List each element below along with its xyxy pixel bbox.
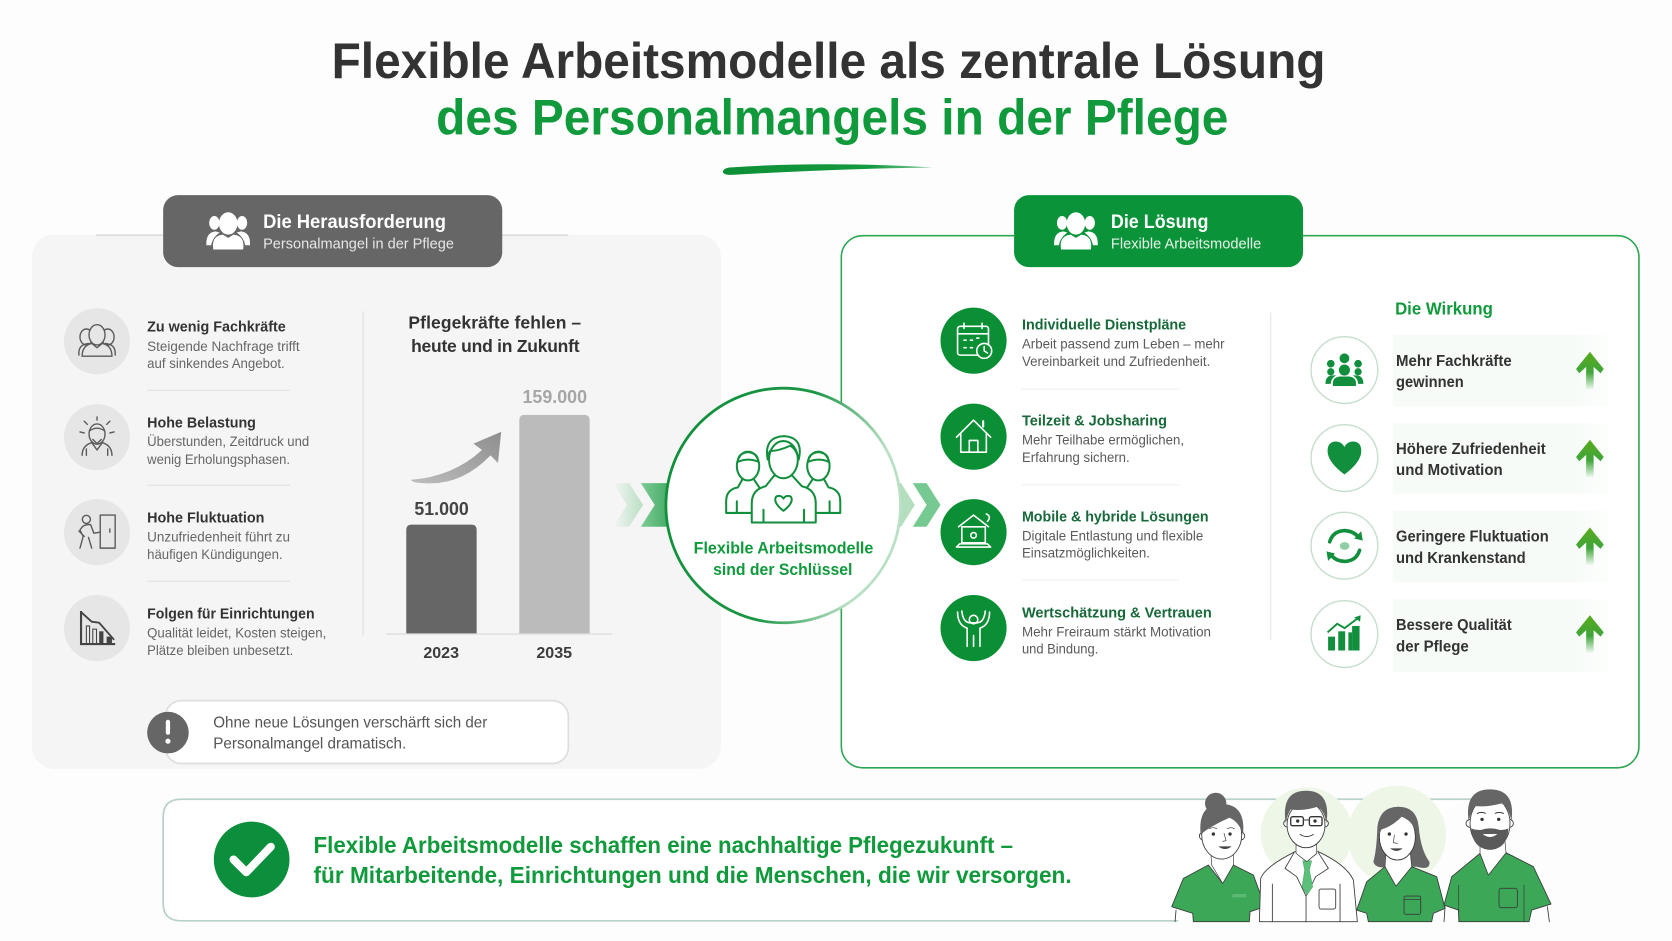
growth arrow — [411, 432, 501, 483]
banner: bottom conclusion: Flexible Arbeitsmodelle schaffen eine nachhaltige Pflegezukunft – — [314, 832, 1013, 858]
person: doctor with glasses — [1259, 791, 1357, 922]
panel header: Die Herausforderung: Die Herausforderung — [263, 211, 446, 233]
item: Hohe Belastung: Hohe Belastung — [147, 415, 256, 432]
item: Hohe Belastung: Überstunden, Zeitdruck und — [147, 434, 309, 449]
title underline brush stroke — [723, 164, 933, 175]
icon: care team with heart — [726, 436, 840, 523]
person: nurse with beard — [1444, 789, 1551, 922]
solution: Teilzeit & Jobsharing: Mehr Teilhabe ermöglichen, — [1022, 433, 1184, 448]
impact: Höhere Zufriedenheit und Motivation — [1311, 423, 1608, 494]
bar 2023: 51.000 — [414, 498, 469, 519]
item: Zu wenig Fachkräfte: Zu wenig Fachkräfte — [147, 319, 286, 336]
solution: Teilzeit & Jobsharing — [940, 404, 1184, 470]
person: nurse with long hair — [1357, 807, 1445, 922]
bar 2035 — [519, 386, 590, 662]
item: Hohe Fluktuation: häufigen Kündigungen. — [147, 547, 283, 562]
bar 2035: 2035 — [536, 645, 572, 662]
solution: Wertschätzung & Vertrauen: Mehr Freiraum stärkt Motivation — [1022, 625, 1211, 640]
icon: check mark — [214, 822, 290, 897]
banner: bottom conclusion: für Mitarbeitende, Einrichtungen und die Menschen, die wir versorgen. — [314, 862, 1072, 888]
callout: warning: Ohne neue Lösungen verschärft sich der — [213, 714, 487, 731]
heading: Die Wirkung: Die Wirkung — [1395, 299, 1493, 319]
bar chart: Pflegekräfte fehlen — [386, 312, 612, 662]
solution: Individuelle Dienstpläne: Arbeit passend zum Leben – mehr — [1022, 337, 1225, 352]
item: Zu wenig Fachkräfte — [64, 308, 300, 374]
impact: Mehr Fachkräfte gewinnen: Mehr Fachkräfte — [1396, 353, 1512, 370]
title — [332, 33, 1325, 145]
panel header: Die Herausforderung — [163, 195, 502, 267]
solution: Wertschätzung & Vertrauen: und Bindung. — [1022, 642, 1098, 657]
item: Hohe Belastung: wenig Erholungsphasen. — [146, 452, 290, 467]
bar 2023 — [406, 498, 477, 662]
banner: bottom conclusion — [163, 799, 1472, 921]
solution: Teilzeit & Jobsharing: Erfahrung sichern. — [1022, 450, 1130, 465]
panel header: Die Herausforderung: Personalmangel in der Pflege — [263, 235, 454, 252]
item: Folgen für Einrichtungen: Plätze bleiben unbesetzt. — [147, 643, 293, 658]
item: Zu wenig Fachkräfte: Steigende Nachfrage trifft — [147, 339, 300, 354]
arrow: chevrons into centre — [613, 483, 672, 527]
panel header: Die Lösung: Flexible Arbeitsmodelle — [1111, 235, 1261, 252]
impact: Bessere Qualität der Pflege: Bessere Qualität — [1396, 617, 1512, 634]
solution: Wertschätzung & Vertrauen: Wertschätzung & Vertrauen — [1022, 604, 1212, 621]
item: Folgen für Einrichtungen: Folgen für Einrichtungen — [147, 606, 315, 623]
person: nurse with bun — [1172, 793, 1265, 922]
panel: Die Herausforderung — [32, 195, 721, 769]
illustration: care team — [1172, 786, 1551, 922]
impact: Geringere Fluktuation und Krankenstand — [1311, 511, 1608, 582]
impact: Mehr Fachkräfte gewinnen — [1311, 335, 1608, 406]
solution: Wertschätzung & Vertrauen — [940, 595, 1212, 661]
arrow: chevrons out of centre — [890, 483, 940, 527]
item: Folgen für Einrichtungen: Qualität leidet, Kosten steigen, — [147, 626, 326, 641]
centre circle: Flexible Arbeitsmodelle sind der Schlüssel: sind der Schlüssel — [713, 560, 852, 579]
panel header: Die Lösung: Die Lösung — [1111, 211, 1208, 233]
solution: Mobile & hybride Lösungen: Digitale Entlastung und flexible — [1022, 529, 1203, 544]
solution: Teilzeit & Jobsharing: Teilzeit & Jobsharing — [1022, 413, 1167, 430]
item: Hohe Fluktuation: Hohe Fluktuation — [147, 510, 264, 527]
chart heading: Pflegekräfte fehlen – — [408, 312, 581, 332]
bar 2023: 2023 — [423, 645, 459, 662]
panel header: Die Lösung — [1014, 195, 1303, 267]
solution: Individuelle Dienstpläne: Individuelle Dienstpläne — [1022, 317, 1186, 334]
impact: Geringere Fluktuation und Krankenstand: Geringere Fluktuation — [1396, 529, 1549, 546]
chart heading: heute und in Zukunft — [411, 336, 580, 356]
solution: Mobile & hybride Lösungen: Mobile & hybride Lösungen — [1022, 508, 1209, 525]
solution: Mobile & hybride Lösungen: Einsatzmöglichkeiten. — [1022, 546, 1150, 561]
item: Hohe Belastung — [64, 404, 309, 470]
item: Zu wenig Fachkräfte: auf sinkendes Angebot. — [147, 356, 285, 371]
impact: Höhere Zufriedenheit und Motivation: und Motivation — [1396, 462, 1503, 479]
impact: Mehr Fachkräfte gewinnen: gewinnen — [1396, 374, 1464, 391]
impact: Höhere Zufriedenheit und Motivation: Höhere Zufriedenheit — [1396, 441, 1546, 458]
title: des Personalmangels in der Pflege — [436, 89, 1228, 145]
centre circle: Flexible Arbeitsmodelle sind der Schlüssel — [666, 388, 901, 623]
solution: Mobile & hybride Lösungen — [940, 499, 1209, 565]
item: Folgen für Einrichtungen — [64, 595, 326, 661]
panel: Die Lösung — [841, 195, 1639, 768]
callout: warning: Personalmangel dramatisch. — [213, 736, 406, 753]
impact: Bessere Qualität der Pflege — [1311, 599, 1608, 672]
callout: warning — [147, 701, 568, 764]
item: Hohe Fluktuation: Unzufriedenheit führt zu — [147, 530, 290, 545]
solution: Individuelle Dienstpläne — [940, 308, 1225, 374]
solution: Individuelle Dienstpläne: Vereinbarkeit und Zufriedenheit. — [1022, 354, 1210, 369]
item: Hohe Fluktuation — [64, 499, 290, 565]
impact: Bessere Qualität der Pflege: der Pflege — [1396, 639, 1469, 656]
centre circle: Flexible Arbeitsmodelle sind der Schlüssel: Flexible Arbeitsmodelle — [694, 538, 873, 557]
title: Flexible Arbeitsmodelle als zentrale Lösung — [332, 33, 1325, 89]
impact: Geringere Fluktuation und Krankenstand: und Krankenstand — [1396, 550, 1526, 567]
bar 2035: 159.000 — [523, 386, 587, 407]
